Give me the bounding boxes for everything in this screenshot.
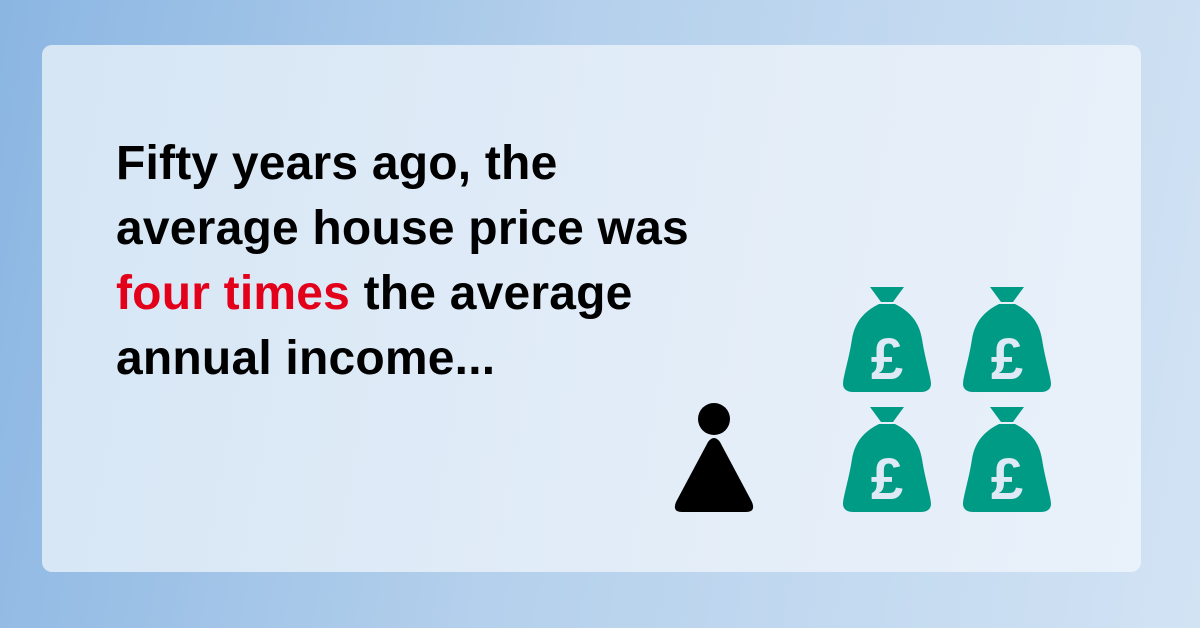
headline text: average house price was [116, 202, 689, 255]
icon: money bag 2 [963, 287, 1051, 392]
icon: person [675, 403, 753, 512]
headline text: four times the average [116, 267, 633, 320]
headline text: annual income... [116, 332, 495, 385]
icon: money bag 4 [963, 407, 1051, 512]
headline text: Fifty years ago, the [116, 137, 557, 190]
headline text [116, 137, 689, 385]
icon: money bag 1 [843, 287, 931, 392]
icon: money bag 3 [843, 407, 931, 512]
panel: main card [42, 45, 1141, 572]
